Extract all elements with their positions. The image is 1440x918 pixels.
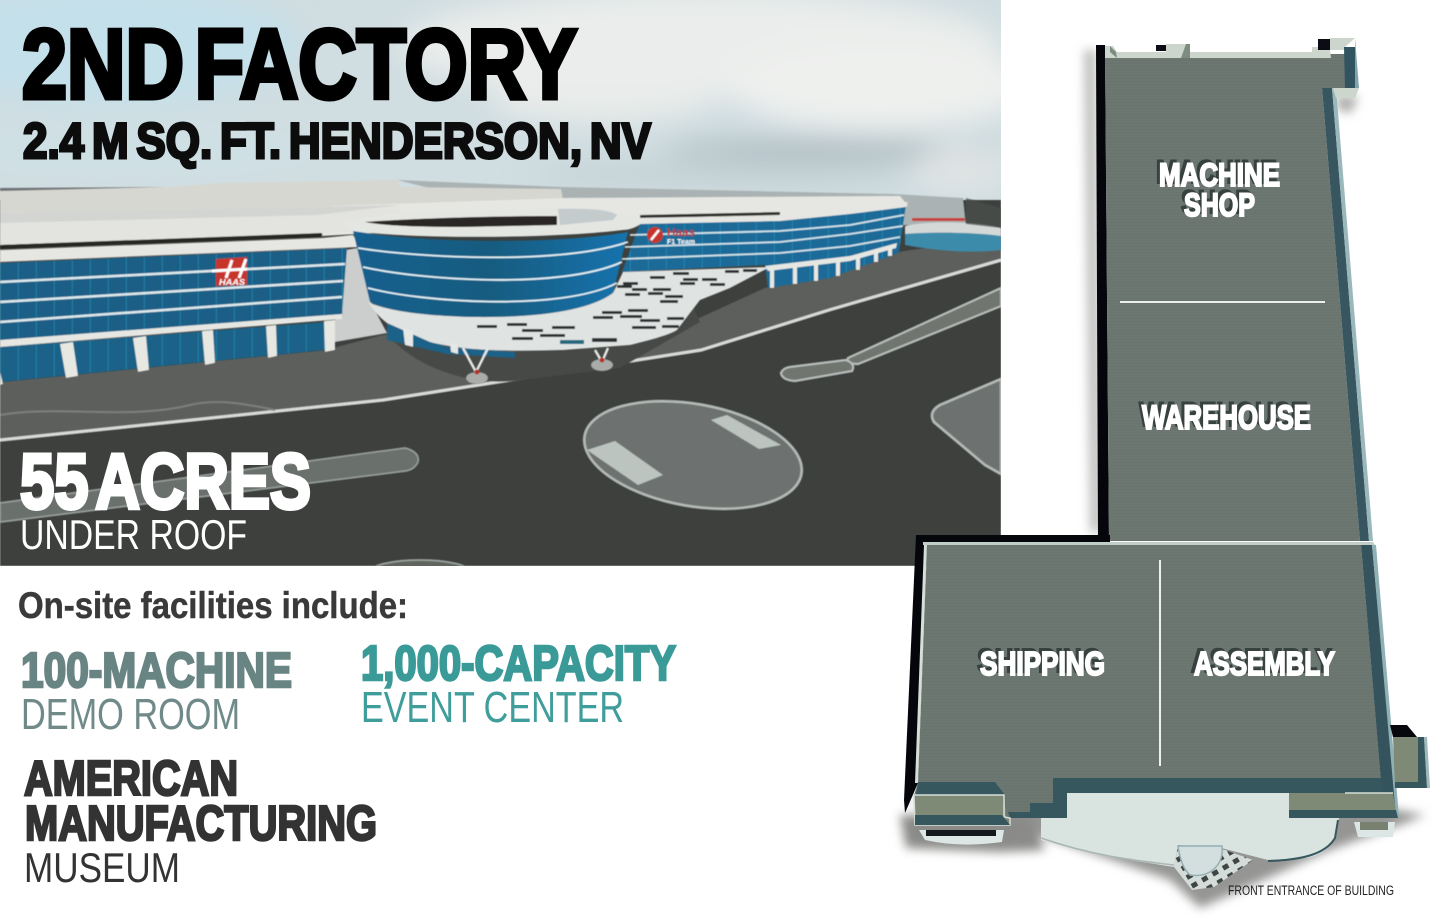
facility: demo room: DEMO ROOM xyxy=(21,690,240,739)
lower left room xyxy=(914,795,1010,845)
stat: 55 acres: UNDER ROOF xyxy=(20,511,247,558)
facility: event center xyxy=(361,637,676,732)
Haas logo xyxy=(212,257,247,287)
back roof xyxy=(397,180,966,226)
facility: event center: EVENT CENTER xyxy=(361,683,624,732)
left wing glass xyxy=(0,248,347,340)
upper block xyxy=(1096,38,1373,541)
road island: long pill xyxy=(848,288,1001,364)
lower right room xyxy=(1289,793,1398,837)
entry plaza xyxy=(1041,793,1339,867)
facility: museum: MANUFACTURING xyxy=(25,797,377,851)
stat: 55 acres: 55 ACRES xyxy=(20,437,311,525)
road island: oval with pads xyxy=(582,399,804,511)
area label: machine shop: MACHINE xyxy=(1159,157,1280,193)
facility: event center: 1,000-CAPACITY xyxy=(361,637,676,691)
front shadow band xyxy=(916,778,1384,818)
area label: warehouse: WAREHOUSE xyxy=(1142,399,1311,437)
stat: 55 acres xyxy=(20,452,310,550)
heading: on-site facilities: On-site facilities include: xyxy=(18,585,408,626)
glass below canopy xyxy=(387,323,515,358)
canopy legs xyxy=(463,348,608,372)
Haas logo: HAAS xyxy=(219,278,246,287)
area label: machine shop: SHOP xyxy=(1184,187,1255,223)
distant entry building xyxy=(904,232,1001,252)
area label: shipping: SHIPPING xyxy=(977,642,1102,679)
photo: factory rendering xyxy=(0,0,1030,584)
facility: demo room: 100-MACHINE xyxy=(21,644,292,698)
road island: short pill xyxy=(781,360,853,381)
F1 team sign: Haas xyxy=(667,227,695,239)
area label: assembly: ASSEMBLY xyxy=(1194,645,1335,682)
title xyxy=(22,26,652,170)
F1 team sign xyxy=(647,227,695,246)
facility: demo room xyxy=(21,644,292,739)
plan drop shadows xyxy=(900,50,1425,908)
ground and road xyxy=(0,200,1001,584)
side room xyxy=(1390,725,1430,788)
facility: museum: AMERICAN xyxy=(24,752,238,806)
upper block top wall xyxy=(1105,38,1355,58)
cylinder tower xyxy=(353,231,628,317)
F1 team sign: F1 Team xyxy=(667,237,695,246)
building xyxy=(0,180,1001,385)
lower block xyxy=(904,535,1399,818)
area label: warehouse: WAREHOUSE xyxy=(1139,396,1308,434)
left wing roof xyxy=(0,214,328,246)
area label: shipping: SHIPPING xyxy=(980,645,1105,682)
title: 2ND FACTORY xyxy=(22,9,577,119)
area label: machine shop: SHOP xyxy=(1181,184,1252,220)
area label: machine shop: MACHINE xyxy=(1156,154,1277,190)
facility: museum: MUSEUM xyxy=(24,844,180,891)
canopy xyxy=(368,267,770,351)
right curved wing glass xyxy=(622,205,906,288)
area label: machine shop xyxy=(1156,154,1280,223)
area label: assembly: ASSEMBLY xyxy=(1191,642,1332,679)
caption: front entrance: FRONT ENTRANCE OF BUILDING xyxy=(1228,883,1394,898)
road island: left pill xyxy=(0,448,418,522)
title: 2.4 M SQ. FT. HENDERSON, NV xyxy=(23,113,652,169)
right wing columns xyxy=(772,246,890,288)
road island: right corner xyxy=(932,379,1001,474)
sky with clouds xyxy=(0,0,1001,209)
side wall xyxy=(335,248,387,342)
left wing columns xyxy=(60,320,335,378)
facility: museum xyxy=(24,752,377,891)
floor plan xyxy=(900,38,1430,908)
road island: bottom arc xyxy=(374,558,466,566)
front entrance canopy xyxy=(1174,846,1253,890)
